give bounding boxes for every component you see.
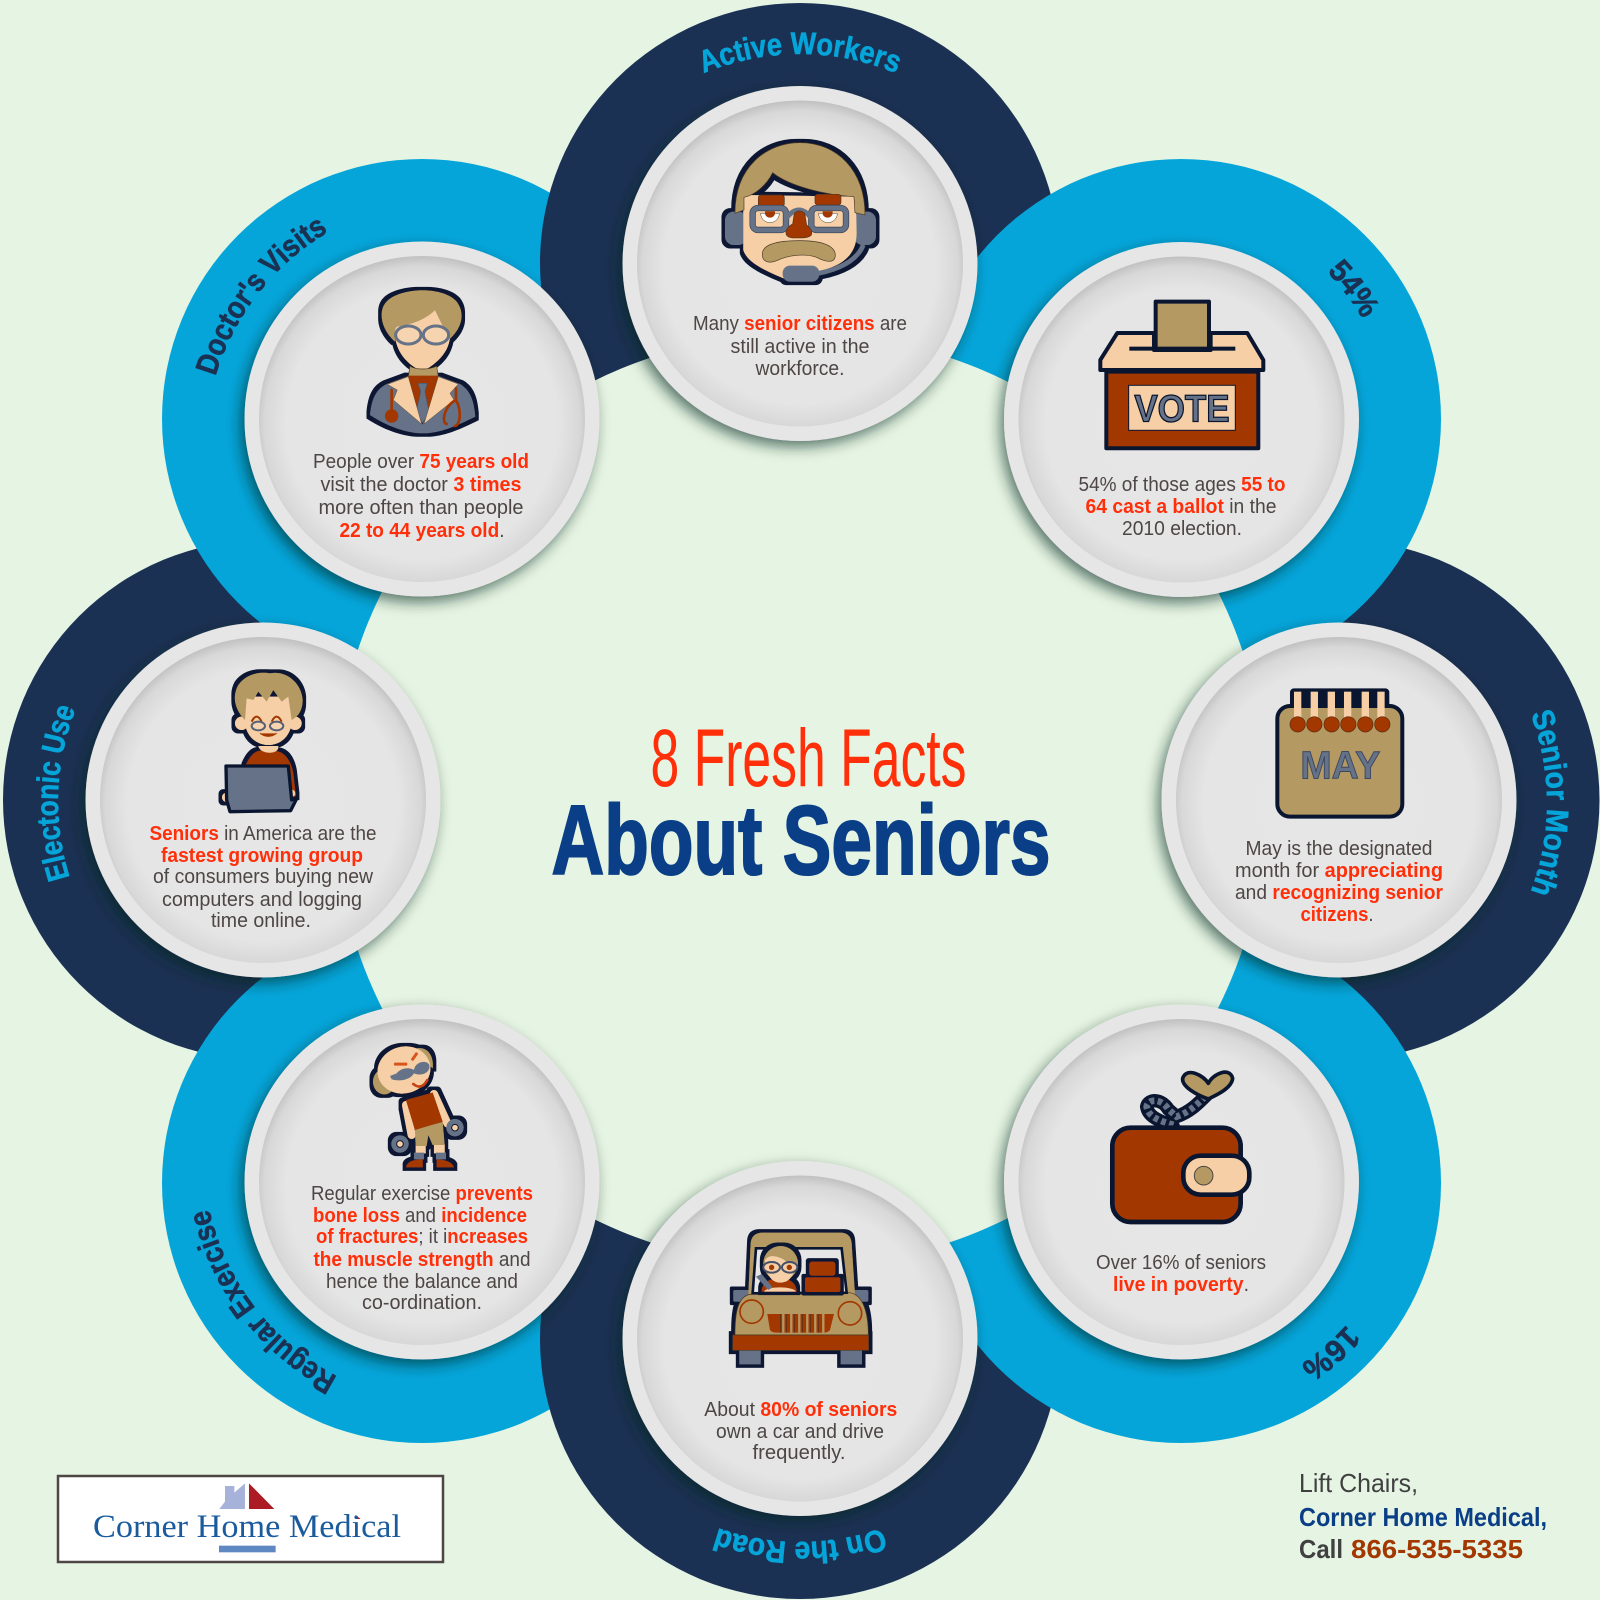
text block: 54% of those ages 55 to (1078, 474, 1286, 496)
panel: doctor's visits (195, 220, 606, 613)
text block (313, 451, 529, 542)
panel: 16% poverty (990, 1000, 1365, 1380)
contact text: Call (1299, 1534, 1343, 1564)
text block: May is the designated (1246, 838, 1432, 860)
text block: 2010 election. (1122, 518, 1242, 540)
text block: visit the doctor 3 times (320, 474, 522, 496)
text block: About 80% of seniors (704, 1399, 897, 1421)
label: Regular Exercise: Regular Exercise (194, 1210, 336, 1395)
text block: hence the balance and (326, 1271, 518, 1293)
logo: Corner Home Medical (58, 1476, 443, 1562)
text block (1078, 474, 1286, 540)
ring: on the road (540, 1079, 1060, 1599)
text block (693, 313, 907, 380)
text block: live in poverty. (1113, 1274, 1249, 1296)
contact text: Corner Home Medical, (1299, 1502, 1547, 1532)
panel: on the road (612, 1156, 984, 1564)
ring: senior month (1080, 540, 1600, 1060)
disc (1162, 622, 1516, 978)
text block (311, 1183, 533, 1314)
ring: regular exercise (162, 923, 682, 1443)
contact text: Lift Chairs, (1299, 1468, 1418, 1498)
ring: electronic use (3, 540, 523, 1060)
title: About Seniors (552, 785, 1050, 895)
center area (333, 333, 1267, 1267)
panel: electronic use (36, 618, 447, 994)
ring: 54% (921, 159, 1441, 679)
disc (622, 1161, 978, 1516)
text block: Regular exercise prevents (311, 1183, 533, 1205)
icon: calendar (1277, 688, 1402, 817)
icon: senior with laptop (222, 673, 303, 812)
text block: frequently. (752, 1442, 846, 1464)
text block: own a car and drive (716, 1421, 884, 1443)
text block (150, 823, 376, 932)
text block (1096, 1252, 1266, 1296)
icon: ballot box: VOTE (1134, 389, 1230, 431)
text block: the muscle strength and (314, 1249, 530, 1271)
contact text (1299, 1468, 1547, 1564)
disc (86, 622, 440, 978)
disc (244, 242, 600, 596)
label: Electonic Use: Electonic Use (36, 706, 74, 882)
label: Senior Month: Senior Month (1531, 710, 1569, 894)
text block: People over 75 years old (313, 451, 529, 473)
text block: 22 to 44 years old. (340, 520, 505, 542)
panel: 54% vote (990, 238, 1379, 614)
label: 54%: 54% (1330, 258, 1379, 317)
panel: senior month (1147, 618, 1569, 994)
label: Active Workers: Active Workers (702, 32, 900, 74)
label: On the Road: On the Road (712, 1528, 886, 1564)
text block: Seniors in America are the (150, 823, 376, 845)
icon: ballot box (1100, 302, 1263, 448)
text block: Over 16% of seniors (1096, 1252, 1266, 1274)
icon: man with headset (725, 143, 876, 282)
label: Doctor's Visits: Doctor's Visits (195, 220, 326, 375)
icon: car with driver (733, 1233, 869, 1364)
text block: Many senior citizens are (693, 313, 907, 335)
disc (1004, 242, 1359, 597)
text block: citizens. (1300, 904, 1374, 926)
text block: month for appreciating (1235, 860, 1443, 882)
text block: still active in the (730, 336, 870, 358)
text block: bone loss and incidence (313, 1205, 527, 1227)
text block: of consumers buying new (153, 866, 374, 888)
text block: co-ordination. (362, 1292, 482, 1314)
text block (1235, 838, 1443, 926)
text block: time online. (211, 910, 311, 932)
icon: wallet (1112, 1072, 1249, 1222)
text block: more often than people (318, 497, 524, 519)
disc (1004, 1004, 1359, 1360)
text block: computers and logging (162, 889, 362, 911)
text block: and recognizing senior (1235, 882, 1443, 904)
icon: calendar: MAY (1300, 743, 1380, 787)
icon: house roof (219, 1483, 361, 1552)
disc (244, 1004, 600, 1360)
text block: workforce. (755, 358, 844, 380)
title: 8 Fresh Facts (650, 713, 966, 804)
icon: senior with dumbbells (372, 1041, 464, 1167)
ring: doctor's visits (162, 159, 682, 679)
contact text: 866-535-5335 (1351, 1534, 1523, 1564)
ring: active workers (540, 3, 1060, 523)
disc (622, 86, 978, 441)
text block (704, 1399, 897, 1464)
text block: 64 cast a ballot in the (1086, 496, 1276, 518)
text block: of fractures; it increases (316, 1226, 528, 1248)
ring: 16% (921, 923, 1441, 1443)
icon: doctor (370, 290, 475, 433)
logo wordmark: Corner Home Medical (93, 1509, 401, 1545)
panel: regular exercise (194, 1000, 606, 1395)
title (552, 713, 1050, 895)
panel: active workers (612, 32, 984, 458)
text block: fastest growing group (161, 845, 363, 867)
label: 16%: 16% (1302, 1326, 1358, 1380)
